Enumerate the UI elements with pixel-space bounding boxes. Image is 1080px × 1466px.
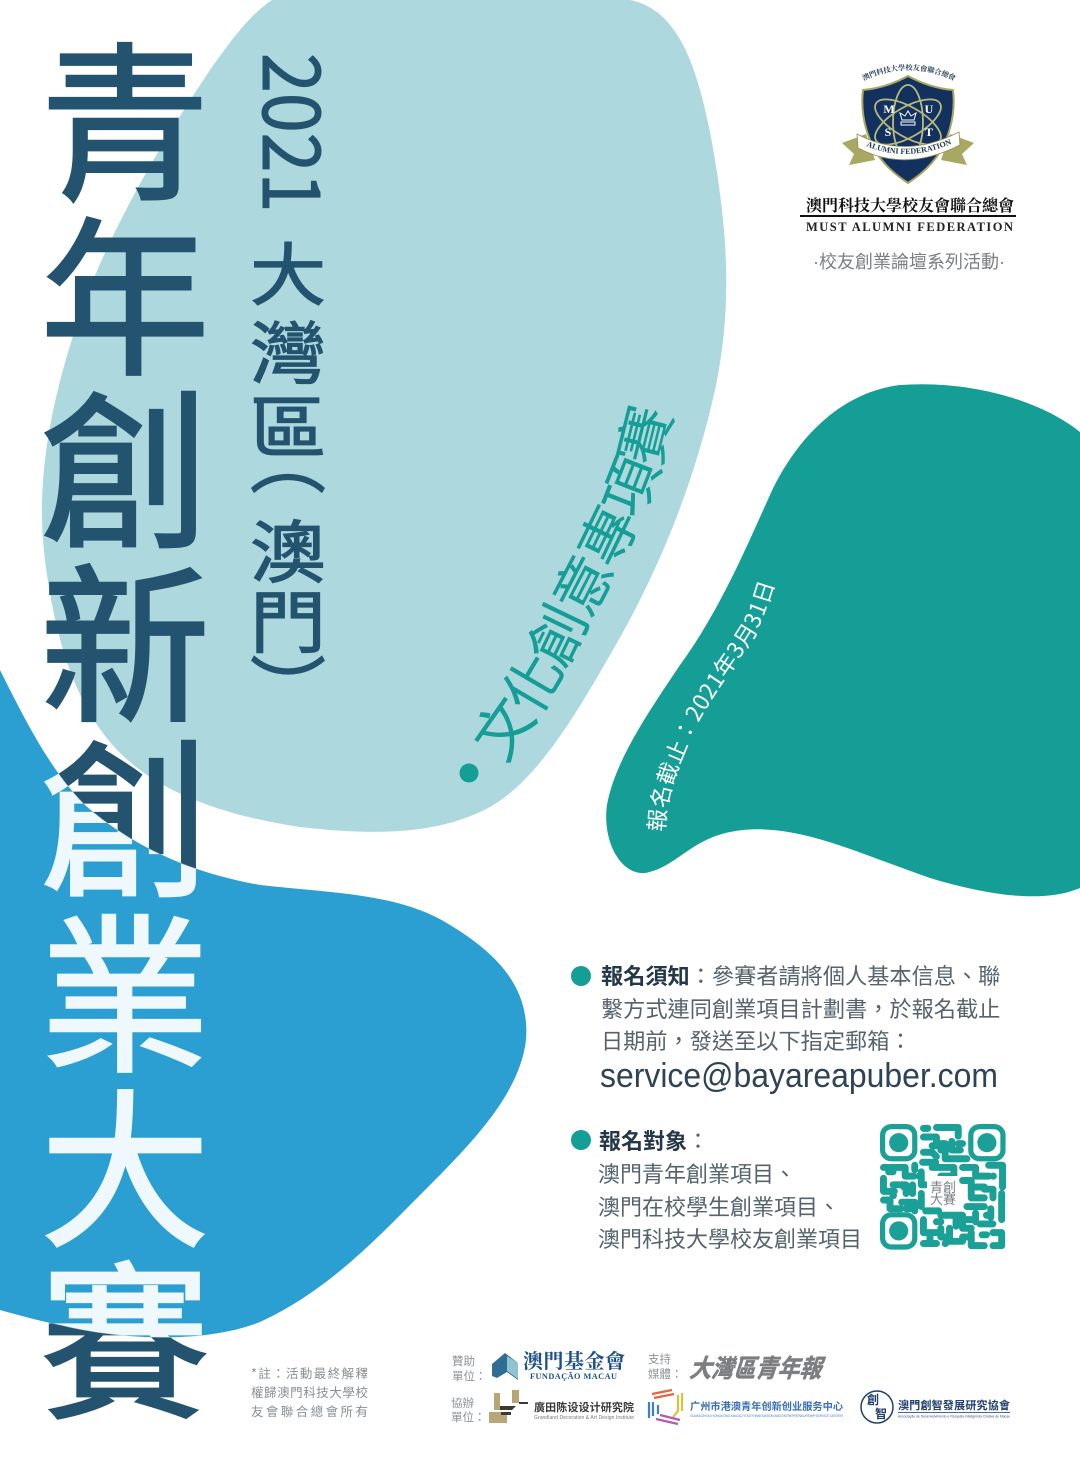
sponsors: supporting organiser labels: 媒體： — [648, 1366, 682, 1382]
emblem — [842, 64, 974, 184]
info: registration notes: 報名須知：參賽者請將個人基本信息、聯 — [601, 959, 1000, 991]
shape: blue blob — [0, 670, 526, 1337]
info: registration notes: 繫方式連同創業項目計劃書，於報名截止 — [601, 992, 1000, 1024]
sponsors: supporting organiser labels: 單位： — [451, 1409, 486, 1425]
title: 青年創新創業大賽 — [40, 0, 210, 1454]
QR code: 大賽 — [930, 1189, 956, 1208]
info: registration notes — [571, 959, 1000, 1095]
subtitle: cultural and creative track: 文化創意專項賽 — [474, 405, 675, 763]
logo: Fundação Macau — [492, 1345, 626, 1381]
sponsors: supporting organiser labels: 贊助 — [452, 1353, 475, 1369]
footnote: *註：活動最終解釋 — [251, 1363, 368, 1382]
sponsors: supporting organiser labels: 單位： — [452, 1368, 486, 1384]
emblem: 澳門科技大學校友會聯合總會 — [862, 64, 956, 81]
info: eligible participants: 澳門在校學生創業項目、 — [598, 1190, 840, 1222]
email: service@bayareapuber.com — [600, 1057, 998, 1095]
logo: MUST alumni federation — [800, 64, 1016, 272]
info: eligible participants: 澳門科技大學校友創業項目 — [598, 1222, 862, 1254]
info: registration notes: 日期前，發送至以下指定郵箱： — [601, 1024, 912, 1056]
logo: Fundação Macau: 澳門基金會 — [523, 1345, 626, 1374]
logo: Macau innovation research association: 創 — [867, 1391, 879, 1408]
logo: Grandland design institute: 廣田陈设设计研究院 — [534, 1399, 634, 1415]
shape: light blue blob — [42, 0, 726, 832]
QR code — [883, 1127, 1003, 1247]
subtitle: 2021 greater bay area: 2021 — [240, 53, 354, 212]
info: eligible participants — [571, 1124, 862, 1254]
emblem: M — [883, 102, 895, 116]
logo: Macau innovation research association: 智 — [875, 1405, 887, 1422]
emblem: T — [925, 125, 933, 139]
emblem: S — [885, 125, 892, 139]
footnote: 權歸澳門科技大學校 — [251, 1382, 368, 1401]
logo: Guangzhou HK Macau youth centre — [649, 1390, 843, 1424]
footnote — [251, 1363, 368, 1420]
info: eligible participants: 報名對象： — [599, 1124, 709, 1156]
logo: Guangzhou HK Macau youth centre: GUANGZHOU HONGKONG MACAU YOUTH INNOVATION AND ENTREPRENEURSHIP SERVICE CENTER — [690, 1414, 843, 1418]
subtitle: 2021 greater bay area — [240, 53, 354, 734]
logo chinese name: 澳門科技大學校友會聯合總會 — [806, 193, 1014, 216]
sponsors: supporting organiser labels: 協辦 — [451, 1395, 474, 1411]
logo: Macau innovation research association: 澳門創智發展研究協會 — [898, 1397, 1010, 1413]
footnote: 友會聯合總會所有 — [251, 1401, 368, 1420]
logo: Guangzhou HK Macau youth centre: 广州市港澳青年创新创业服务中心 — [690, 1398, 843, 1413]
sponsors: supporting organiser labels: 支持 — [648, 1351, 671, 1367]
shape: teal blob — [606, 384, 1080, 896]
logo: Fundação Macau: FUNDAÇÃO MACAU — [530, 1372, 617, 1381]
sponsors: supporting organiser labels — [451, 1351, 682, 1425]
logo: Greater Bay Area youth daily: 大灣區青年報 — [686, 1349, 830, 1385]
logo english name: MUST ALUMNI FEDERATION — [806, 220, 1013, 234]
emblem: ALUMNI FEDERATION — [866, 139, 951, 154]
QR center label: 青創 — [930, 1177, 956, 1196]
logo: Macau innovation research association — [861, 1391, 1010, 1423]
logo: Macau innovation research association: Associação de Desenvolvimento e Pesquisa Inteligência Criativa de Macau — [898, 1414, 1010, 1418]
info: eligible participants: 澳門青年創業項目、 — [598, 1157, 796, 1189]
bullet dot — [460, 764, 478, 782]
logo: Grandland design institute — [489, 1390, 634, 1423]
emblem: U — [925, 102, 934, 116]
bullet — [571, 1130, 591, 1150]
subtitle: 2021 greater bay area: 大灣區︵澳門︶ — [250, 220, 326, 734]
deadline: 報名截止：2021年3月31日 — [646, 582, 776, 831]
logo: Grandland design institute: Grandland Decoration & Art Design Institute — [534, 1415, 634, 1421]
forum series line: ·校友創業論壇系列活動· — [813, 252, 1005, 272]
bullet — [571, 966, 591, 986]
